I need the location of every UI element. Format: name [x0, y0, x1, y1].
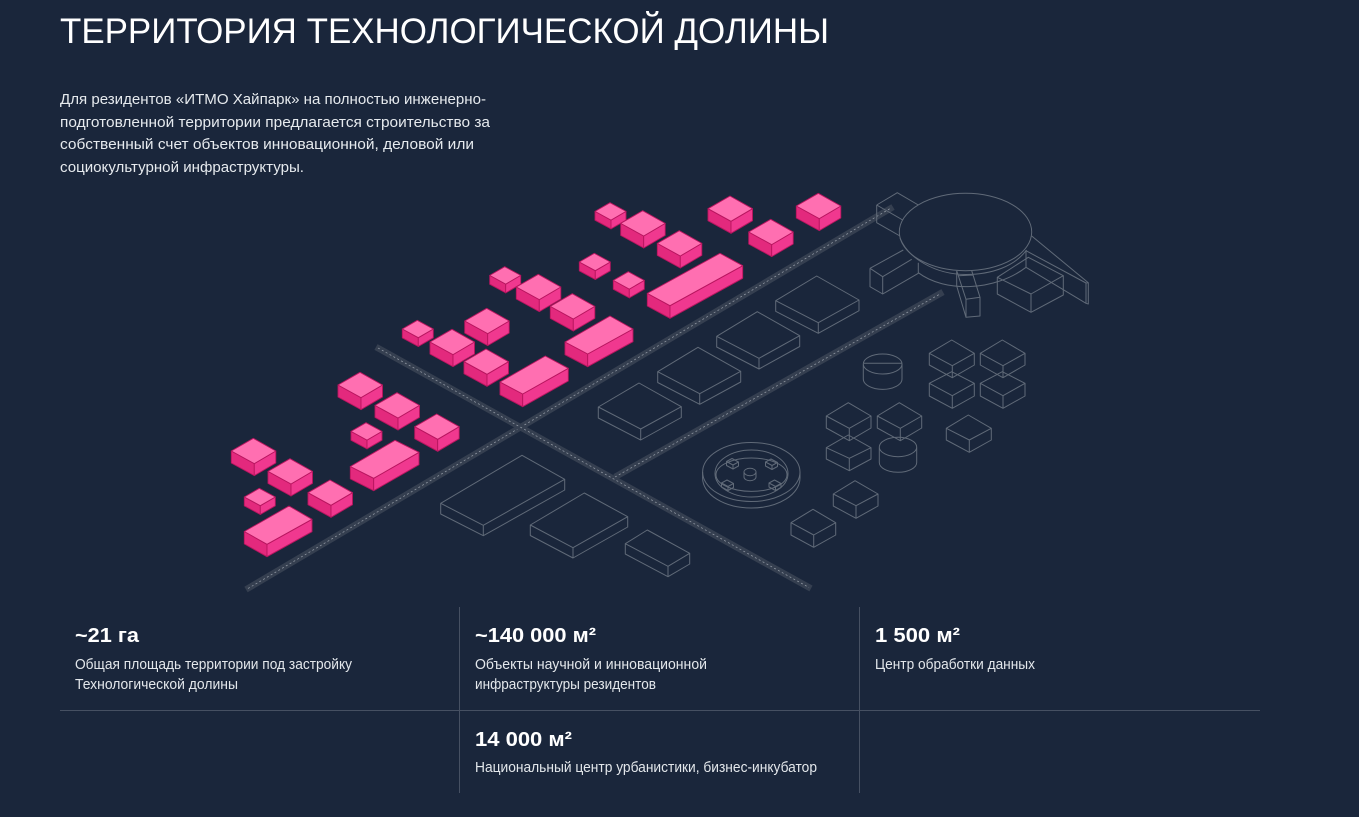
stats grid rules — [60, 607, 1260, 793]
stat: total area: Общая площадь территории под застройку — [75, 657, 353, 673]
stat: total area: Технологической долины — [75, 677, 238, 693]
stat: data centre — [875, 624, 1036, 673]
pink resident plots — [231, 193, 841, 557]
stat: data centre: Центр обработки данных — [875, 657, 1036, 673]
stat: total area — [75, 624, 353, 693]
plot block middle row — [490, 253, 743, 367]
intro text block: подготовленной территории предлагается строительство за — [60, 114, 491, 131]
stat: resident infrastructure: инфраструктуры резидентов — [475, 677, 656, 693]
site map illustration — [231, 193, 1088, 589]
stat: total area: ~21 га — [75, 624, 140, 647]
plot block south-west lower — [231, 438, 352, 557]
stat: urbanism centre — [475, 728, 817, 776]
outlined central buildings — [598, 276, 859, 440]
intro text block — [60, 91, 491, 176]
title: ТЕРРИТОРИЯ ТЕХНОЛОГИЧЕСКОЙ ДОЛИНЫ — [60, 11, 829, 51]
cylinder — [879, 437, 917, 472]
intro text block: социокультурной инфраструктуры. — [60, 159, 304, 176]
stat: data centre: 1 500 м² — [875, 624, 960, 647]
roads — [246, 207, 943, 590]
plot block south-west upper — [338, 372, 459, 491]
stat: urbanism centre: 14 000 м² — [475, 728, 572, 751]
plot block south-centre row — [402, 308, 568, 407]
stat: resident infrastructure: ~140 000 м² — [475, 624, 596, 647]
intro text block: Для резидентов «ИТМО Хайпарк» на полностью инженерно- — [60, 91, 486, 108]
circular hub building — [870, 193, 1088, 317]
plot block north row — [595, 193, 841, 268]
cooling tanks and small outlined blocks — [791, 340, 1025, 547]
stat: urbanism centre: Национальный центр урбанистики, бизнес-инкубатор — [475, 760, 817, 776]
stat: resident infrastructure — [475, 624, 707, 693]
outlined southern buildings — [441, 455, 690, 577]
stat: resident infrastructure: Объекты научной и инновационной — [475, 657, 707, 673]
round plaza — [703, 442, 800, 508]
cylinder — [863, 354, 902, 389]
intro text block: собственный счет объектов инновационной, деловой или — [60, 136, 474, 153]
